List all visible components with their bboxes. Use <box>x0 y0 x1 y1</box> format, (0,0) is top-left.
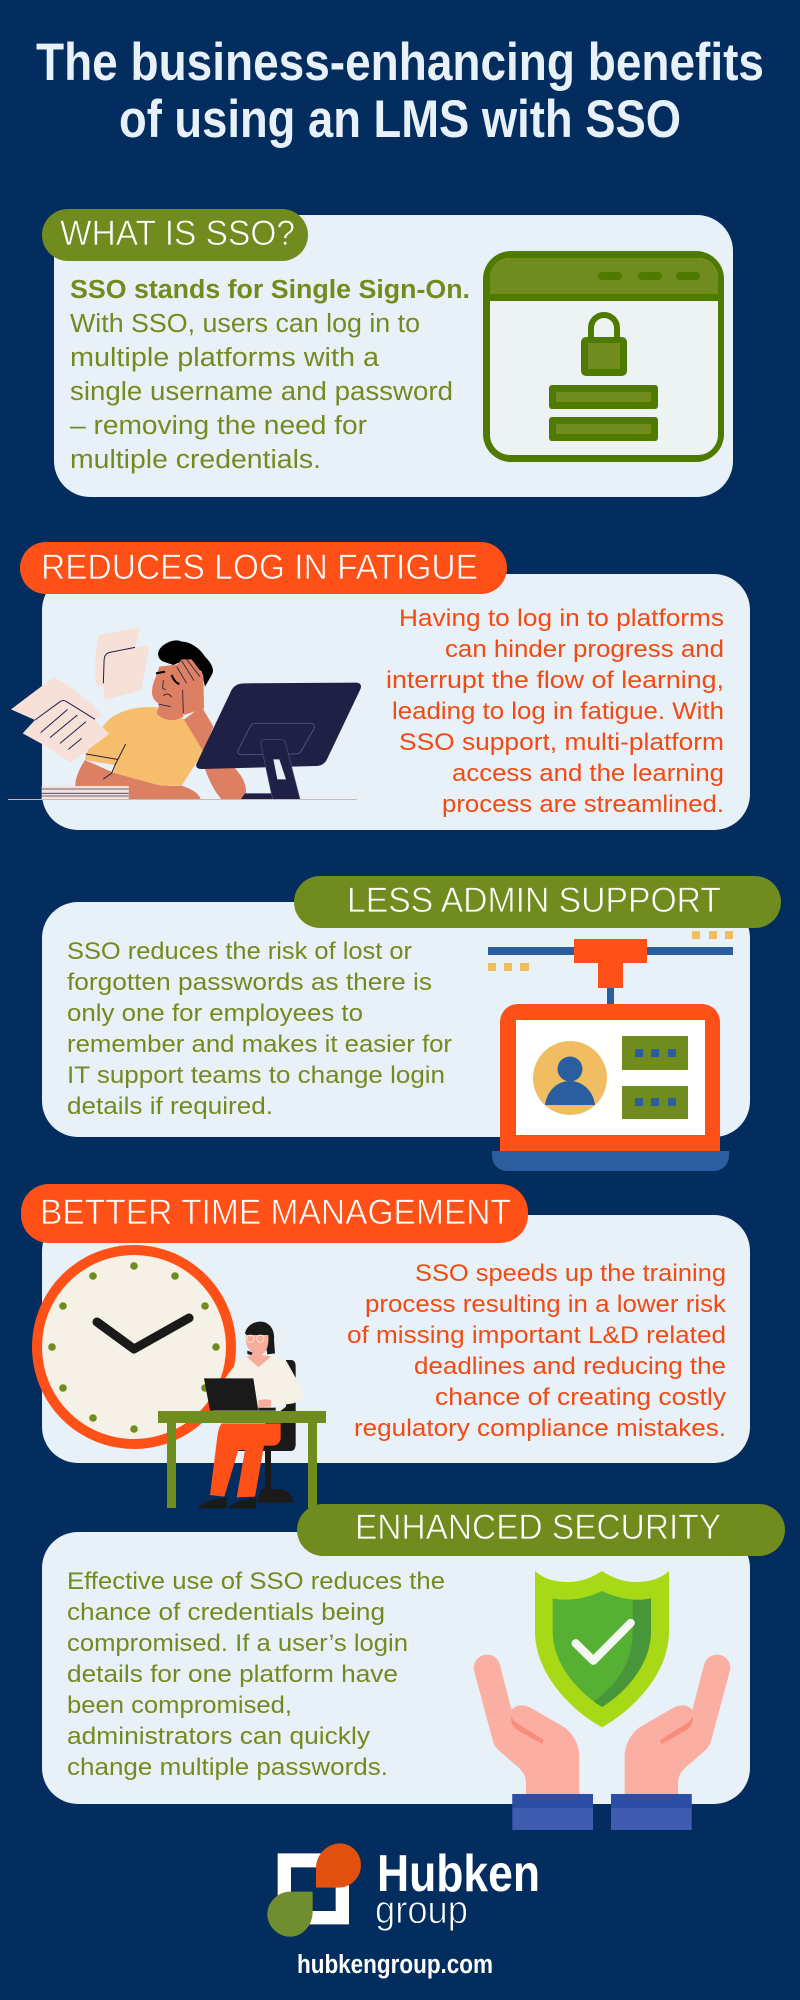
heading: better time management <box>21 1184 528 1243</box>
panel: reduces log in fatigue <box>8 542 750 830</box>
heading: reduces log in fatigue: REDUCES LOG IN FATIGUE <box>41 548 478 587</box>
text block: admin support: SSO reduces the risk of lost or <box>67 938 412 965</box>
text block: log in fatigue: leading to log in fatigue. With <box>392 698 724 725</box>
text block: security <box>67 1568 445 1781</box>
text block: log in fatigue <box>386 605 724 818</box>
panel: better time management <box>21 1184 750 1508</box>
text block: what is SSO: – removing the need for <box>70 412 368 440</box>
text block: what is SSO: multiple credentials. <box>70 446 321 474</box>
text block: admin support: details if required. <box>67 1093 273 1120</box>
illustration: woman working at desk <box>158 1322 326 1508</box>
text block: time management <box>347 1260 727 1442</box>
text block: security: Effective use of SSO reduces the <box>67 1568 445 1595</box>
text block: log in fatigue: can hinder progress and <box>445 636 724 663</box>
text block: what is SSO: single username and password <box>70 378 453 406</box>
text block: time management: deadlines and reducing the <box>414 1353 726 1380</box>
text block: time management: chance of creating costly <box>435 1384 727 1411</box>
title <box>36 33 764 149</box>
text block: admin support <box>67 938 452 1120</box>
text block: time management: regulatory compliance mistakes. <box>354 1415 726 1442</box>
heading: enhanced security: ENHANCED SECURITY <box>355 1508 721 1547</box>
illustration: laptop with user profile <box>488 931 733 1171</box>
text block: log in fatigue: process are streamlined. <box>442 791 724 818</box>
heading: better time management: BETTER TIME MANAGEMENT <box>40 1193 511 1232</box>
text block: time management: of missing important L&D related <box>347 1322 726 1349</box>
logo wordmark: Hubken <box>377 1845 540 1903</box>
icon: shield held by hands <box>474 1571 730 1830</box>
text block: security: been compromised, <box>67 1692 292 1719</box>
logo wordmark: group <box>375 1889 468 1932</box>
text block: time management: SSO speeds up the training <box>415 1260 726 1287</box>
text block: log in fatigue: Having to log in to platforms <box>399 605 724 632</box>
text block: what is SSO <box>70 276 470 474</box>
text block: admin support: only one for employees to <box>67 1000 363 1027</box>
text block: what is SSO: With SSO, users can log in to <box>70 310 420 338</box>
heading: what is SSO <box>42 209 308 261</box>
text block: security: change multiple passwords. <box>67 1754 388 1781</box>
heading: less admin support: LESS ADMIN SUPPORT <box>347 881 721 920</box>
website address: hubkengroup.com <box>297 1951 493 1979</box>
text block: log in fatigue: SSO support, multi-platform <box>399 729 724 756</box>
text block: admin support: forgotten passwords as there is <box>67 969 432 996</box>
text block: admin support: IT support teams to change login <box>67 1062 445 1089</box>
title: of using an LMS with SSO <box>119 90 681 149</box>
illustration: wall clock <box>32 1245 236 1449</box>
text block: time management: process resulting in a lower risk <box>365 1291 727 1318</box>
text block: log in fatigue: access and the learning <box>452 760 724 787</box>
logo mark <box>267 1843 361 1937</box>
panel: enhanced security <box>42 1504 785 1830</box>
text block: security: compromised. If a user’s login <box>67 1630 408 1657</box>
text block: what is SSO: SSO stands for Single Sign-On. <box>70 276 470 304</box>
text block: log in fatigue: interrupt the flow of learning, <box>386 667 724 694</box>
text block: security: details for one platform have <box>67 1661 398 1688</box>
text block: security: administrators can quickly <box>67 1723 371 1750</box>
logo wordmark <box>375 1845 540 1932</box>
panel: less admin support <box>42 876 781 1171</box>
heading: less admin support <box>294 876 781 928</box>
heading: enhanced security <box>297 1504 785 1556</box>
logo: Hubken group <box>267 1843 540 1937</box>
text block: security: chance of credentials being <box>67 1599 385 1626</box>
illustration: tired man at computer <box>8 627 361 800</box>
heading: what is SSO: WHAT IS SSO? <box>60 214 295 253</box>
panel: what is SSO <box>42 209 733 497</box>
icon: browser window with padlock <box>483 251 724 462</box>
text block: admin support: remember and makes it easier for <box>67 1031 452 1058</box>
text block: what is SSO: multiple platforms with a <box>70 344 380 372</box>
